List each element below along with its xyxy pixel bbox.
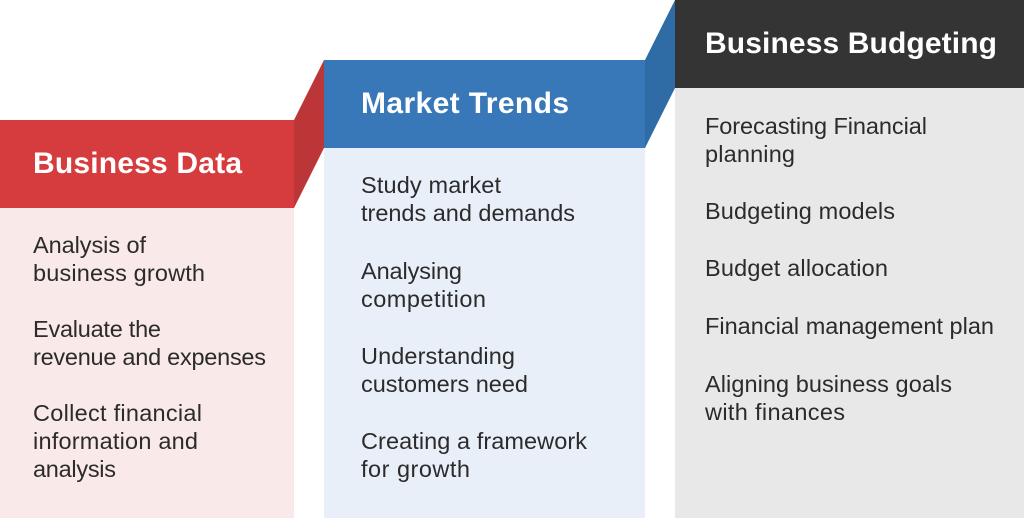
text block: business budgeting items: Forecasting Financial (705, 113, 927, 139)
text block: business data items: business growth (33, 260, 205, 286)
heading: business data: Business Data (33, 147, 242, 180)
text block: business data items: revenue and expenses (33, 344, 266, 370)
body background: business budgeting (675, 88, 1024, 518)
text block: business budgeting items: Budget allocation (705, 255, 888, 281)
connector fold: blue (645, 0, 675, 148)
connector fold: red (294, 60, 324, 208)
text block: business data items: Evaluate the (33, 316, 161, 342)
text block: business data items: information and (33, 428, 198, 454)
body background: business data (0, 208, 294, 518)
text block: market trends items: for growth (361, 456, 470, 482)
text block: business budgeting items: with finances (704, 399, 845, 425)
text block: business data items: Collect financial (33, 400, 202, 426)
heading: business budgeting: Business Budgeting (705, 27, 997, 60)
panel: business data (0, 60, 324, 518)
text block: business budgeting items (704, 113, 994, 425)
text block: market trends items: trends and demands (361, 200, 575, 226)
panel: business budgeting (675, 0, 1024, 518)
text block: business budgeting items: Aligning business goals (705, 371, 952, 397)
panel: market trends (324, 0, 675, 518)
header band: market trends (324, 60, 645, 148)
text block: market trends items: competition (361, 286, 486, 312)
text block: business data items: analysis (33, 456, 116, 482)
text block: market trends items: Analysing (361, 258, 462, 284)
header band: business data (0, 120, 294, 208)
header band: business budgeting (675, 0, 1024, 88)
text block: market trends items: Study market (361, 172, 501, 198)
text block: market trends items (361, 172, 587, 482)
text block: market trends items: customers need (361, 371, 528, 397)
text block: market trends items: Understanding (361, 343, 515, 369)
text block: business budgeting items: planning (705, 141, 795, 167)
text block: business data items (33, 232, 266, 482)
text block: business budgeting items: Financial management plan (705, 313, 994, 339)
body background: market trends (324, 148, 645, 518)
heading: market trends: Market Trends (361, 87, 569, 120)
text block: business data items: Analysis of (33, 232, 146, 258)
text block: business budgeting items: Budgeting models (705, 198, 895, 224)
text block: market trends items: Creating a framework (361, 428, 587, 454)
